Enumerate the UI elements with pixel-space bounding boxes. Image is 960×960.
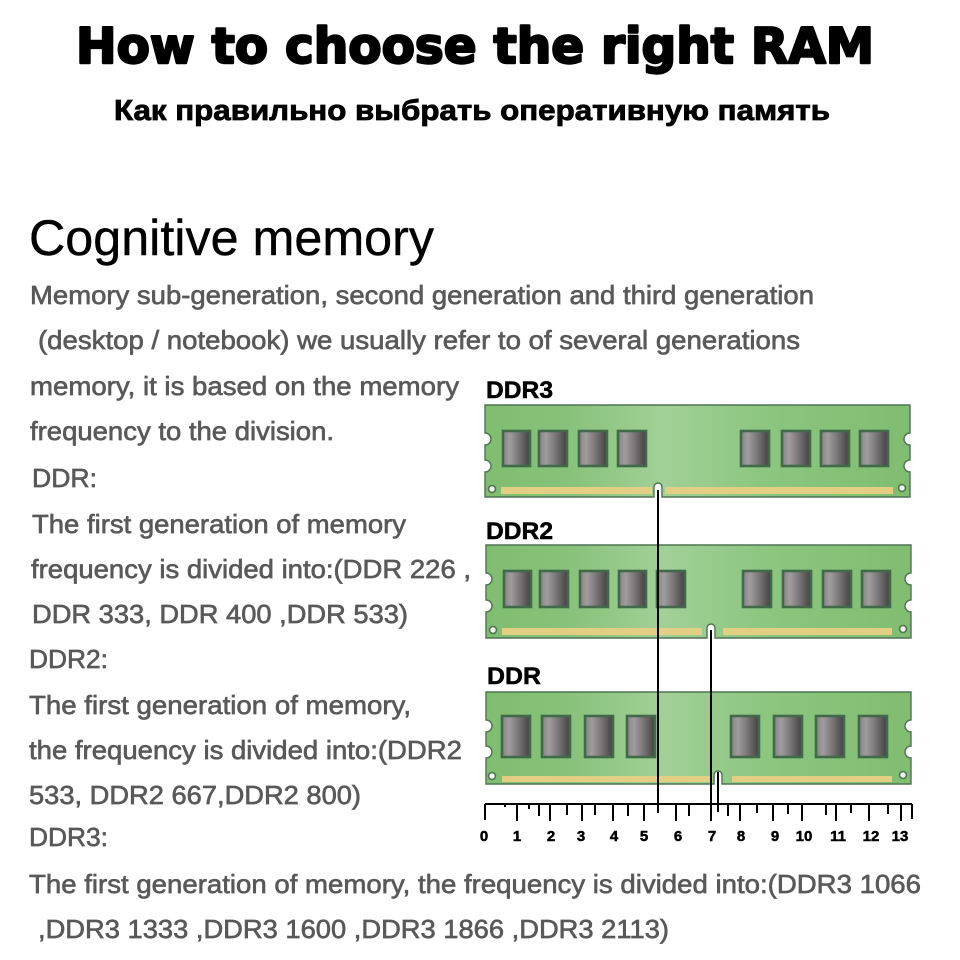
ruler: 7 <box>708 828 716 845</box>
ruler: 2 <box>547 828 555 845</box>
text block: DDR: DDR 333, DDR 400 ,DDR 533) <box>32 599 408 629</box>
title: How to choose the right RAM <box>76 18 874 75</box>
section heading: Cognitive memory <box>29 210 434 266</box>
text block: introduction: memory, it is based on the memory <box>30 371 459 401</box>
text block: introduction <box>30 280 814 446</box>
text block: DDR2: DDR2: <box>29 644 108 674</box>
text block: DDR <box>31 463 471 629</box>
ruler: 6 <box>674 828 682 845</box>
subtitle: Как правильно выбрать оперативную память <box>114 95 830 127</box>
ruler: 13 <box>892 828 908 845</box>
text block: introduction: (desktop / notebook) we usually refer to of several generations <box>38 325 800 355</box>
text block: DDR: DDR: <box>32 463 97 493</box>
ruler: 12 <box>863 828 879 845</box>
text block: DDR: The first generation of memory <box>32 509 406 539</box>
text block: DDR: frequency is divided into:(DDR 226 , <box>31 554 471 584</box>
ruler: 8 <box>737 828 745 845</box>
ruler: 4 <box>610 828 619 845</box>
ruler: 5 <box>640 828 648 845</box>
ruler: 11 <box>830 828 846 845</box>
text block: DDR2 <box>29 644 462 810</box>
ruler <box>480 804 912 845</box>
ruler: 9 <box>771 828 779 845</box>
module: DDR3 <box>485 405 910 497</box>
text block: introduction: frequency to the division. <box>30 416 334 446</box>
ruler: 3 <box>577 828 585 845</box>
label: DDR2: DDR2 <box>486 518 553 545</box>
module: DDR2 <box>486 545 911 638</box>
text block: DDR3: The first generation of memory, the frequency is divided into:(DDR3 1066 <box>29 869 921 899</box>
text block: DDR2: The first generation of memory, <box>29 690 411 720</box>
text block: introduction: Memory sub-generation, second generation and third generation <box>30 280 814 310</box>
label: DDR: DDR <box>487 663 541 690</box>
text block: DDR2: the frequency is divided into:(DDR2 <box>29 735 462 765</box>
text block: DDR3: ,DDR3 1333 ,DDR3 1600 ,DDR3 1866 ,DDR3 2113) <box>38 914 669 944</box>
module: DDR <box>486 692 911 784</box>
ruler: 0 <box>480 828 488 845</box>
ruler: 1 <box>513 828 521 845</box>
label: DDR3: DDR3 <box>486 377 553 404</box>
text block: DDR3: DDR3: <box>29 822 108 852</box>
ruler: 10 <box>796 828 812 845</box>
notch guide lines <box>658 490 718 813</box>
text block: DDR2: 533, DDR2 667,DDR2 800) <box>29 780 361 810</box>
text block: DDR3 <box>29 822 921 944</box>
